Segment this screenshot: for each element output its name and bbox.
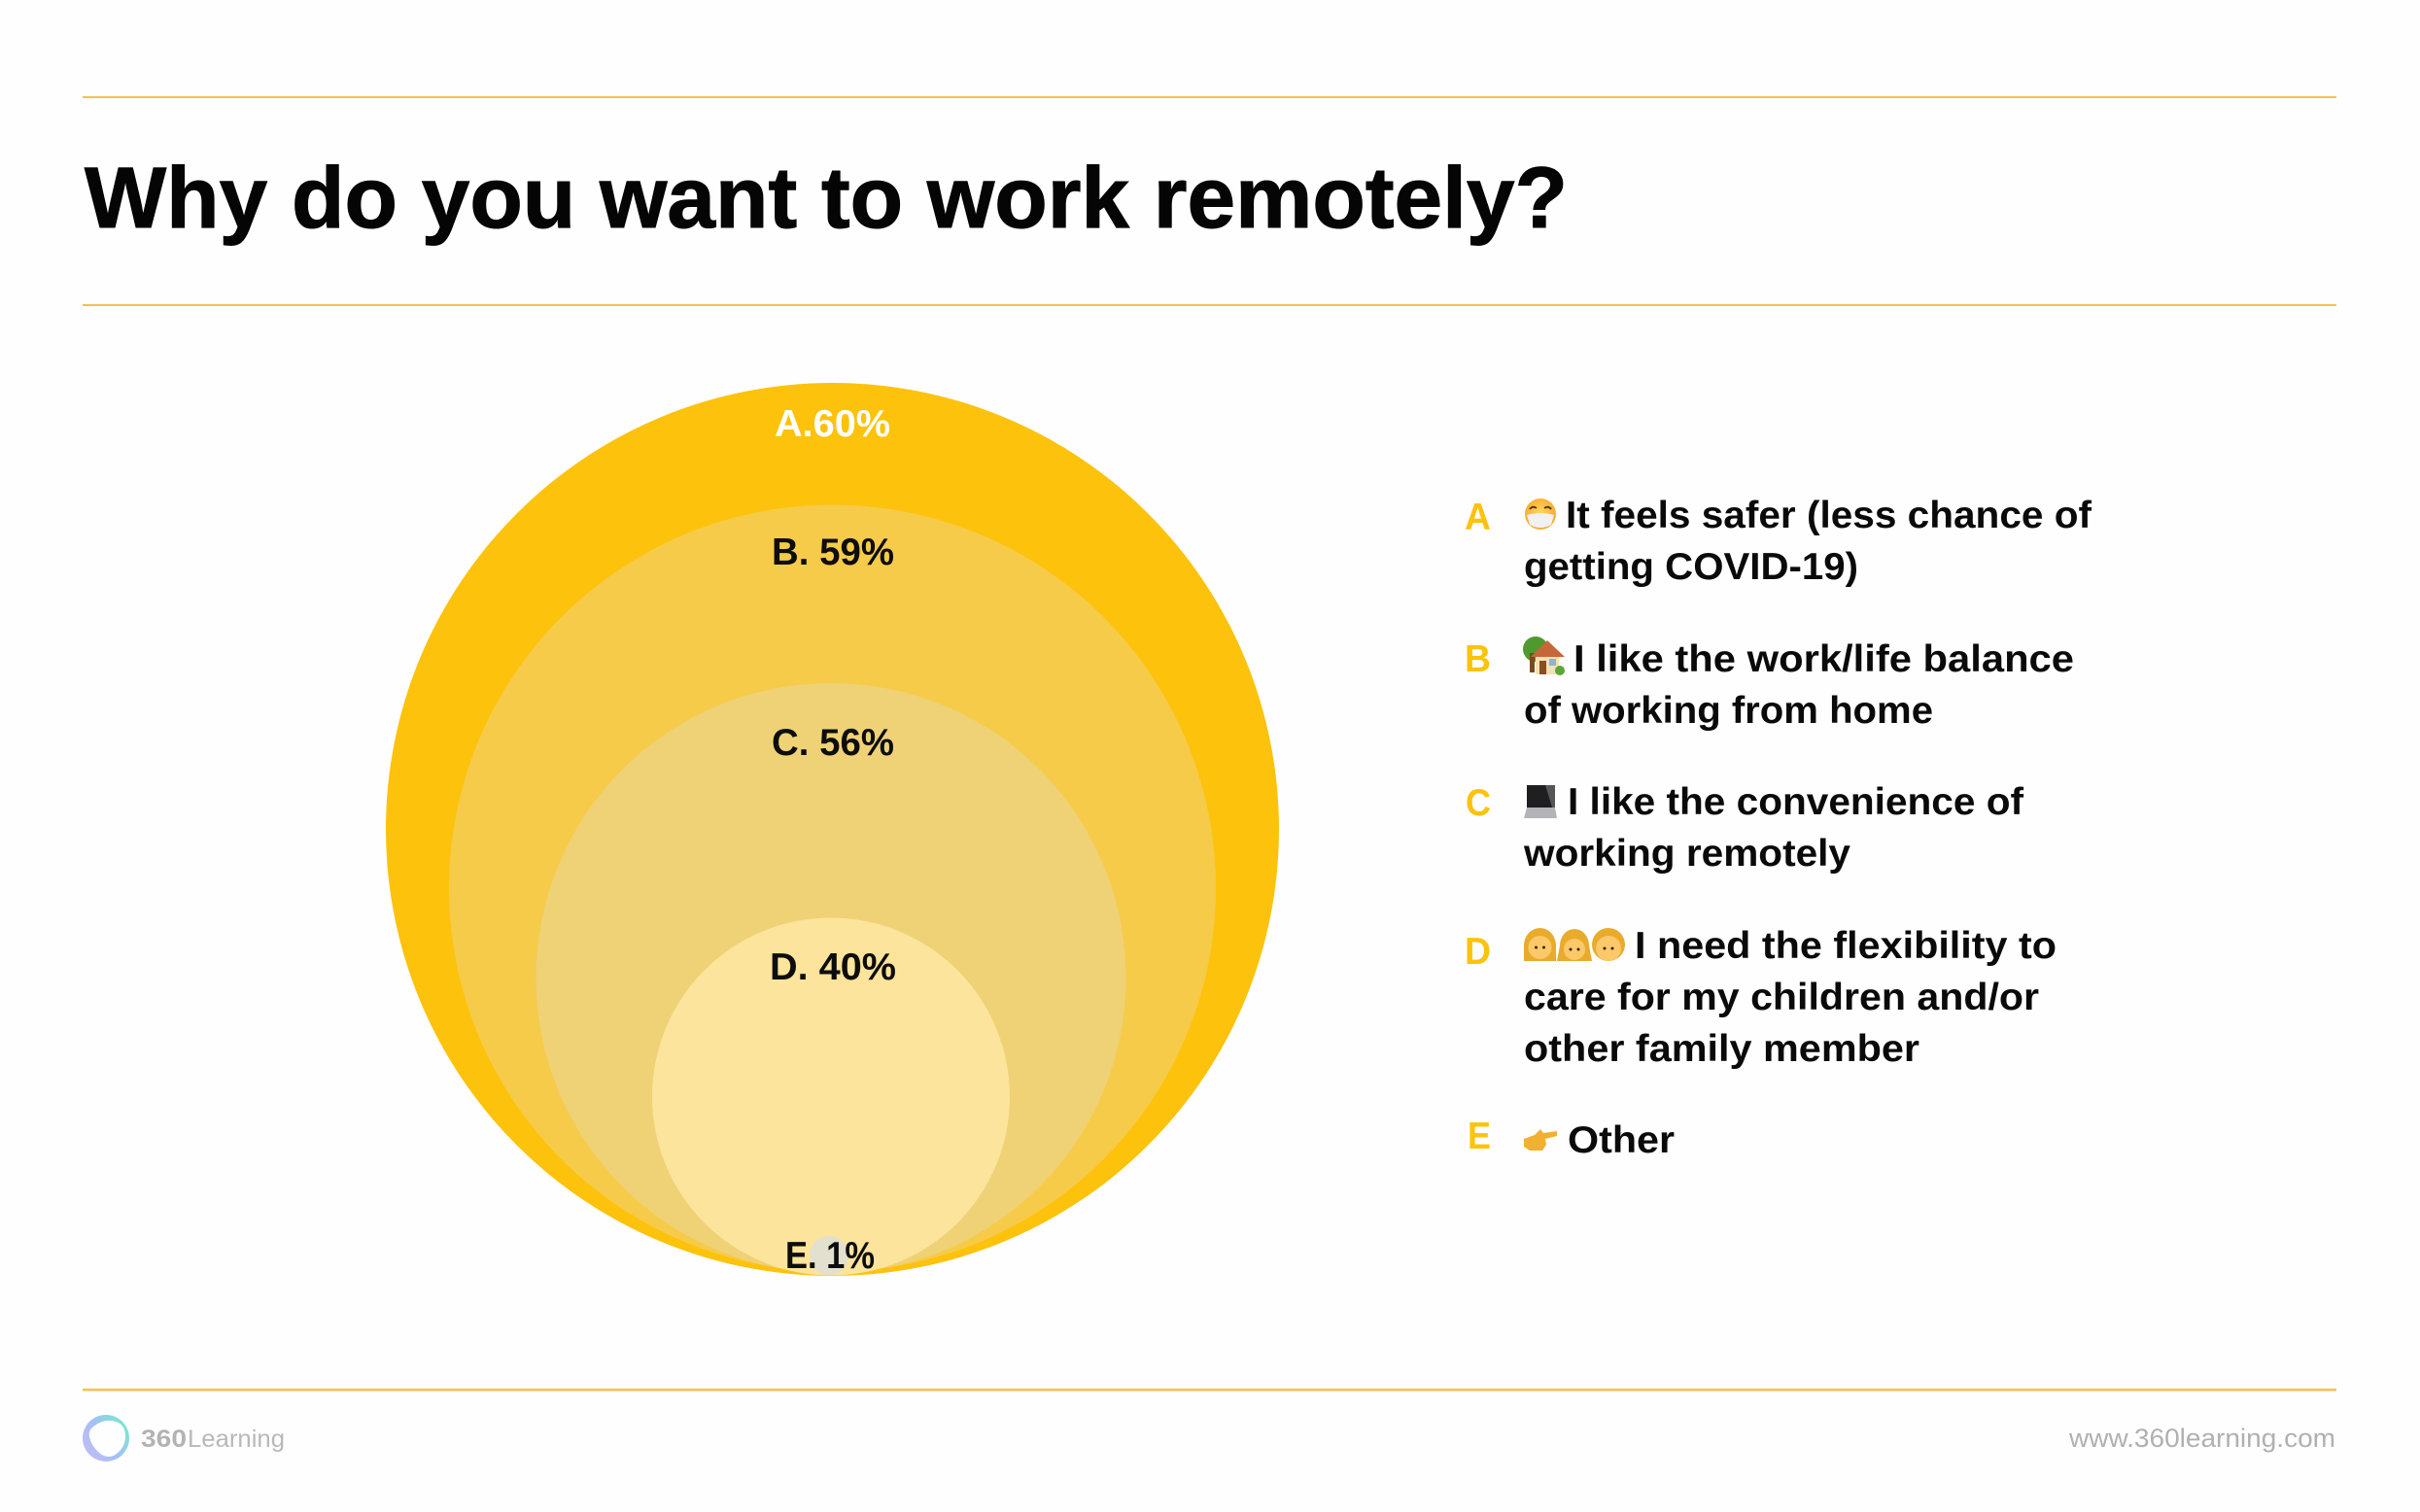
icon: pointing hand [1524,1129,1557,1151]
icon: house with garden [1523,636,1565,675]
circle D [652,917,1010,1275]
letter C: C [1466,782,1491,824]
label D: D. 40% [770,946,896,988]
footer url: www.360learning.com [2068,1424,2335,1453]
label C: C. 56% [772,722,894,764]
legend item A: getting COVID-19) [1524,546,1858,588]
legend item B: of working from home [1524,690,1933,732]
icon: logo ring [83,1415,129,1461]
legend item B [1465,636,2074,732]
icon: family faces [1524,928,1625,961]
legend text E: Other [1568,1119,1675,1161]
letter A: A [1465,497,1491,538]
icon: laptop [1524,785,1557,818]
legend item D: care for my children and/or [1524,977,2039,1018]
legend item C: working remotely [1523,833,1850,875]
legend text D: I need the flexibility to [1635,925,2057,967]
title: Why do you want to work remotely? [85,149,1568,246]
label A: A.60% [775,403,890,445]
label B: B. 59% [772,532,894,573]
circle E [810,1236,848,1275]
logo text: 360 [141,1426,187,1453]
legend item E [1468,1116,1675,1161]
legend item C [1466,781,2024,875]
letter E: E [1468,1116,1491,1157]
legend text B: I like the work/life balance [1573,638,2074,680]
circle C [536,683,1125,1273]
letter D: D [1465,931,1491,973]
icon: face with medical mask [1525,498,1556,530]
nested circle chart [386,383,1279,1277]
legend text C: I like the convenience of [1568,781,2024,823]
legend [1465,495,2092,1161]
letter B: B [1465,638,1491,680]
label E: E. 1% [785,1235,875,1277]
circle B [449,505,1216,1271]
legend item D [1465,925,2057,1070]
legend item A [1465,495,2092,588]
circle A [386,383,1279,1276]
footer logo: 360Learning [83,1415,285,1461]
legend item D: other family member [1524,1028,1919,1070]
legend text A: It feels safer (less chance of [1566,495,2092,536]
footer logo: 360Learning: Learning [188,1426,285,1453]
